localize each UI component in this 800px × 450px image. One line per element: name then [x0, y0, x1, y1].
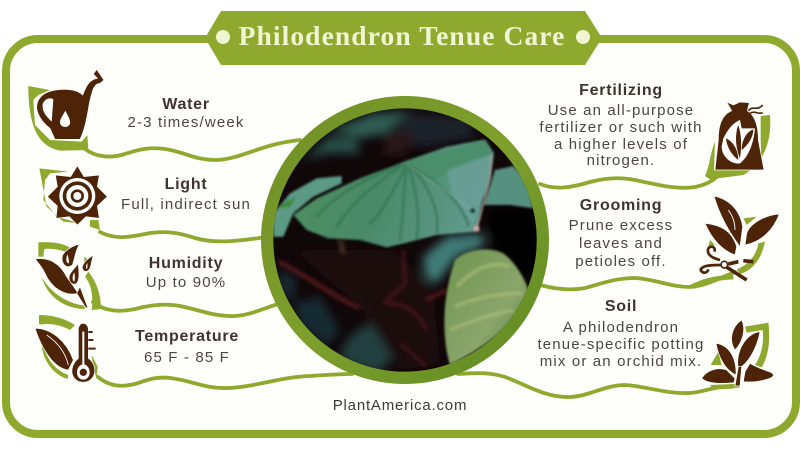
- heading: grooming: Grooming: [580, 197, 662, 214]
- leaf backing: [710, 323, 769, 389]
- left leaf: [705, 223, 737, 255]
- leaf backing: [39, 168, 100, 230]
- label: water: 2-3 times/week: [128, 114, 244, 131]
- icon: fertilizer sack: [705, 102, 770, 179]
- top leaf: [732, 320, 744, 350]
- main leaf: [293, 139, 494, 247]
- heading: humidity: Humidity: [149, 255, 223, 272]
- heading: temperature: Temperature: [135, 328, 239, 345]
- photo: [273, 108, 537, 372]
- label: temperature: 65 F - 85 F: [144, 349, 230, 366]
- leaf: [35, 259, 78, 294]
- icon: grooming shears: [690, 196, 779, 288]
- vine: temperature: [98, 374, 352, 388]
- scale ticks: [88, 331, 96, 350]
- text: soil: [537, 298, 705, 370]
- side leaf: [273, 176, 342, 237]
- paragraph: fertilizing: Use an all-purpose: [548, 102, 694, 119]
- paragraph: soil: mix or an orchid mix.: [540, 353, 702, 370]
- right leaf: [745, 214, 779, 245]
- label: light: Full, indirect sun: [121, 196, 251, 213]
- vine: grooming: [540, 272, 735, 289]
- paragraph: fertilizing: fertilizer or such with: [539, 119, 703, 136]
- vine: light: [100, 232, 266, 241]
- text: grooming: [569, 197, 673, 270]
- drop 2: [69, 263, 79, 284]
- leaf backing: [28, 86, 88, 151]
- text: fertilizing: [539, 82, 703, 169]
- thermometer column: [77, 332, 90, 380]
- vine: fertilizing: [540, 172, 722, 188]
- plant mark: [722, 120, 755, 164]
- leaf backing: [39, 315, 98, 379]
- drop 3: [82, 255, 93, 271]
- text: temperature: [135, 328, 239, 366]
- thermometer: [72, 323, 95, 382]
- right leaf: [738, 332, 760, 368]
- tie string: [748, 105, 763, 113]
- text: water: [128, 96, 244, 131]
- paragraph: grooming: Prune excess: [569, 217, 673, 234]
- leaf backing: [38, 242, 101, 310]
- paragraph: soil: A philodendron: [563, 319, 679, 336]
- text: humidity: [146, 255, 226, 291]
- vine: humidity: [93, 302, 278, 316]
- paragraph: grooming: leaves and: [579, 235, 663, 252]
- right leaf: [484, 166, 533, 208]
- text: light: [121, 176, 251, 213]
- vine: water: [85, 140, 300, 160]
- heading: soil: Soil: [605, 298, 637, 315]
- banner shape: [205, 11, 602, 65]
- icon: humidity: [35, 242, 101, 310]
- icon: sun: [39, 166, 107, 230]
- can body: [37, 69, 104, 139]
- icon: thermometer: [35, 315, 98, 382]
- leaf: [35, 328, 73, 370]
- water drop: [60, 111, 70, 127]
- stem: [735, 367, 742, 386]
- title dot right: [576, 30, 590, 44]
- heading: light: Light: [165, 176, 207, 193]
- label: humidity: Up to 90%: [146, 274, 226, 291]
- stem: [77, 287, 88, 309]
- icon: soil plant: [702, 320, 773, 389]
- top leaf: [714, 196, 743, 247]
- vine: soil: [458, 373, 738, 397]
- soil mound: [702, 363, 773, 383]
- leaf backing: [690, 217, 765, 288]
- leaf backing: [705, 115, 770, 179]
- paragraph: grooming: petioles off.: [575, 253, 667, 270]
- sun rays: [47, 166, 107, 225]
- title: Philodendron Tenue Care: [239, 20, 565, 51]
- heading: fertilizing: Fertilizing: [579, 82, 663, 99]
- shears: [723, 265, 747, 280]
- sun rings: [59, 178, 95, 214]
- drop 1: [62, 244, 79, 267]
- paragraph: fertilizing: nitrogen.: [587, 152, 655, 169]
- photo circle: [267, 103, 547, 380]
- heading: water: Water: [162, 96, 210, 113]
- ring: [268, 103, 542, 377]
- title banner: [205, 11, 602, 65]
- can handle hole: [43, 98, 53, 122]
- icon: watering can: [28, 69, 104, 151]
- paragraph: soil: tenue-specific potting: [537, 336, 705, 353]
- left leaf: [716, 343, 736, 375]
- paragraph: fertilizing: a higher levels of: [554, 136, 688, 153]
- sack: [715, 102, 764, 170]
- lower leaf: [444, 249, 528, 365]
- title dot left: [216, 30, 230, 44]
- source credit: PlantAmerica.com: [333, 397, 467, 414]
